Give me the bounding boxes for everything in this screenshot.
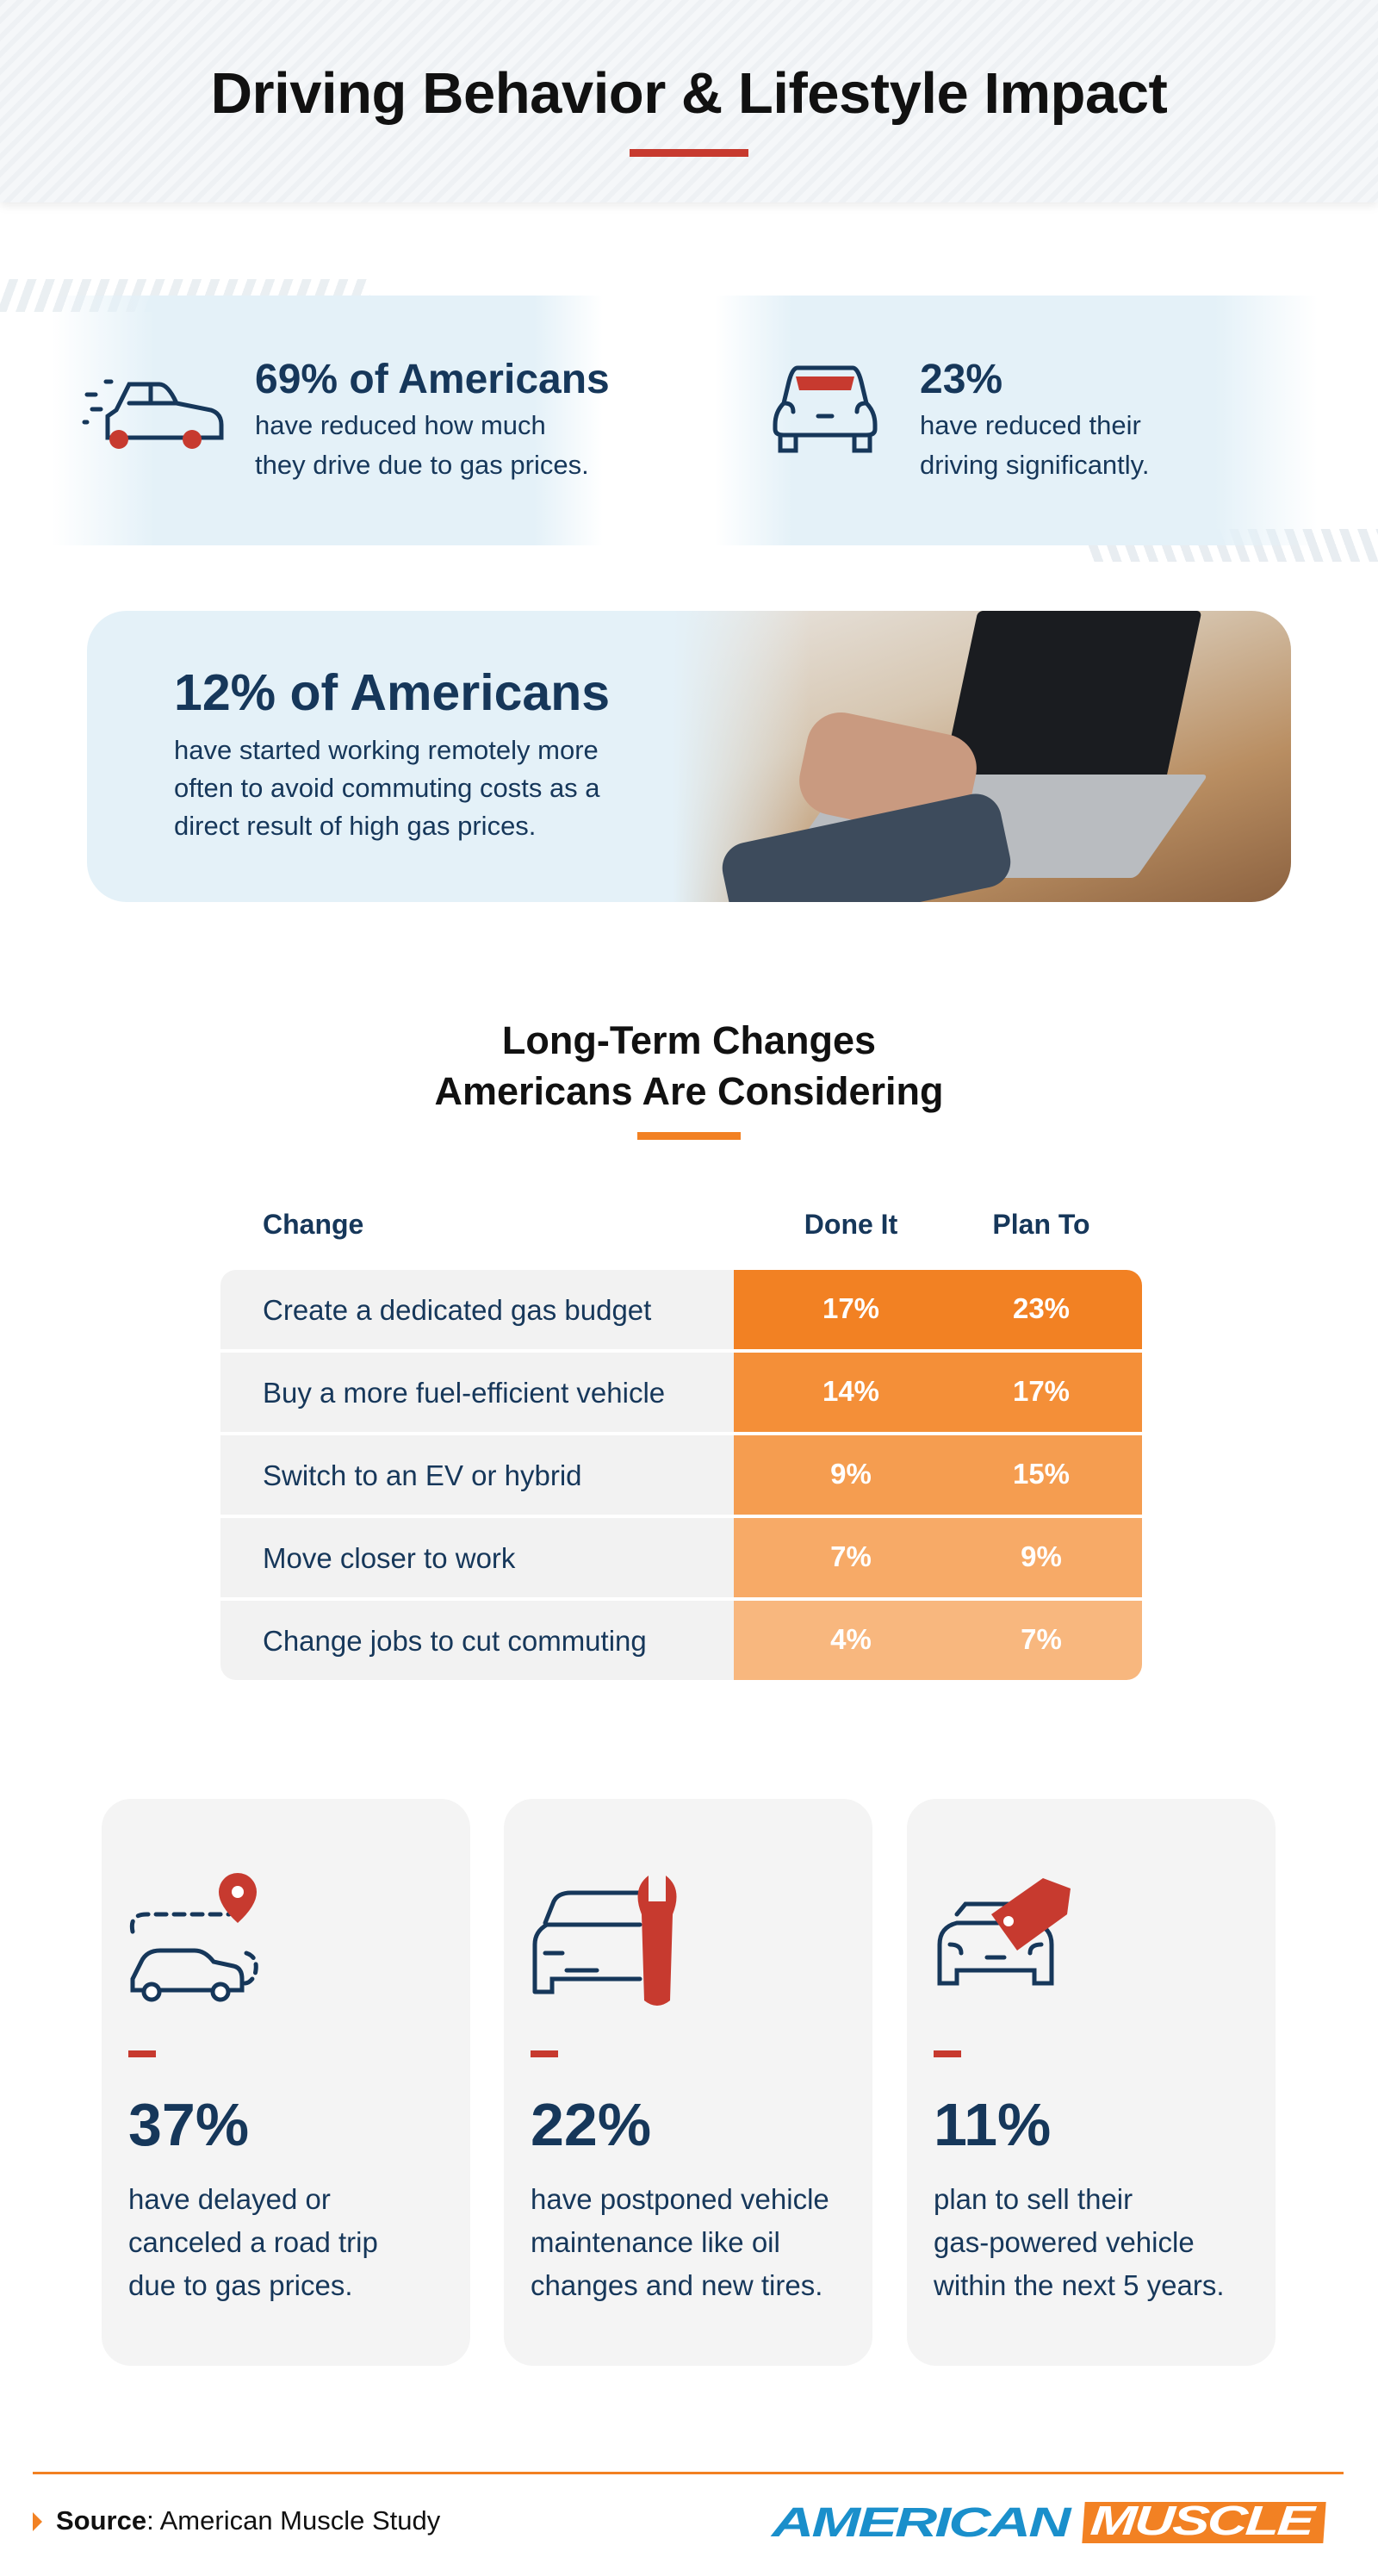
card text: maintenance like oil (531, 2226, 780, 2258)
card text: 22% (531, 2091, 651, 2158)
red dash (531, 2050, 558, 2057)
row 1: 17% (822, 1292, 879, 1324)
row 3: Switch to an EV or hybrid (263, 1459, 582, 1491)
red dash (934, 2050, 961, 2057)
icon: car with price tag (937, 1878, 1071, 1985)
chevrons top-left (0, 279, 370, 312)
remote text (174, 664, 610, 841)
table (220, 1209, 1142, 1680)
stat text: have reduced how much (255, 410, 546, 440)
remote text: 12% of Americans (174, 664, 610, 721)
row 5 (220, 1601, 1142, 1680)
card text (128, 2091, 378, 2301)
row 4: 9% (1021, 1540, 1062, 1572)
row 2: Buy a more fuel-efficient vehicle (263, 1377, 665, 1409)
chevrons bottom-right (1085, 529, 1378, 562)
heading: long-term changes: Long-Term Changes (502, 1018, 876, 1062)
row 2 (220, 1353, 1142, 1432)
card: maintenance (504, 1799, 872, 2366)
row 5: 4% (830, 1623, 872, 1655)
card text: due to gas prices. (128, 2269, 353, 2301)
table header: Done It (804, 1209, 897, 1240)
row 4: 7% (830, 1540, 872, 1572)
card: sell vehicle (907, 1799, 1276, 2366)
table header: Plan To (992, 1209, 1090, 1240)
remote text: often to avoid commuting costs as a (174, 773, 600, 803)
source: Source: American Muscle Study (56, 2505, 440, 2536)
card text: have postponed vehicle (531, 2183, 829, 2215)
row 2: 14% (822, 1375, 879, 1407)
heading: long-term changes (434, 1018, 944, 1113)
remote text: have started working remotely more (174, 735, 599, 765)
remote text: direct result of high gas prices. (174, 811, 536, 841)
red dash (128, 2050, 156, 2057)
card text (531, 2091, 829, 2301)
header band (0, 0, 1378, 202)
stat text (920, 357, 1149, 480)
footer divider (33, 2472, 1344, 2474)
heading underline (637, 1132, 741, 1140)
row 3: 9% (830, 1458, 872, 1490)
icon: car with wrench (532, 1876, 677, 2006)
row 3 (220, 1435, 1142, 1515)
row 5: 7% (1021, 1623, 1062, 1655)
row 1: Create a dedicated gas budget (263, 1294, 651, 1326)
card text: 37% (128, 2091, 249, 2158)
photo: laptop on desk (673, 611, 1291, 902)
logo (770, 2498, 1326, 2546)
card text (934, 2091, 1225, 2301)
icon: car front (773, 365, 877, 453)
panel: 23% stat (715, 296, 1318, 545)
heading: long-term changes: Americans Are Considering (434, 1069, 944, 1113)
row 5: Change jobs to cut commuting (263, 1625, 647, 1657)
row 4 (220, 1518, 1142, 1597)
stat text: 23% (920, 357, 1002, 402)
row 1 (220, 1270, 1142, 1349)
table header (263, 1209, 1090, 1240)
card text: changes and new tires. (531, 2269, 822, 2301)
panel: remote work (87, 611, 1291, 902)
panel: 69% stat (52, 296, 603, 545)
stat text: 69% of Americans (255, 357, 610, 402)
card text: 11% (934, 2091, 1051, 2158)
icon: moving car (83, 379, 224, 449)
title: Driving Behavior & Lifestyle Impact (211, 61, 1167, 126)
table header: Change (263, 1209, 363, 1240)
card text: plan to sell their (934, 2183, 1133, 2215)
row 4: Move closer to work (263, 1542, 515, 1574)
logo: AMERICAN (772, 2500, 1069, 2546)
row 3: 15% (1013, 1458, 1070, 1490)
row 2: 17% (1013, 1375, 1070, 1407)
title underline (630, 149, 748, 157)
stat text: have reduced their (920, 410, 1141, 440)
icon: car with map pin (129, 1873, 258, 2002)
card text: canceled a road trip (128, 2226, 378, 2258)
stat text: they drive due to gas prices. (255, 450, 589, 480)
stat text: driving significantly. (920, 450, 1149, 480)
row 1: 23% (1013, 1292, 1070, 1324)
card: road trip (102, 1799, 470, 2366)
logo: MUSCLE (1089, 2498, 1313, 2544)
stat text (255, 357, 610, 480)
card text: gas-powered vehicle (934, 2226, 1195, 2258)
card text: have delayed or (128, 2183, 331, 2215)
card text: within the next 5 years. (934, 2269, 1225, 2301)
